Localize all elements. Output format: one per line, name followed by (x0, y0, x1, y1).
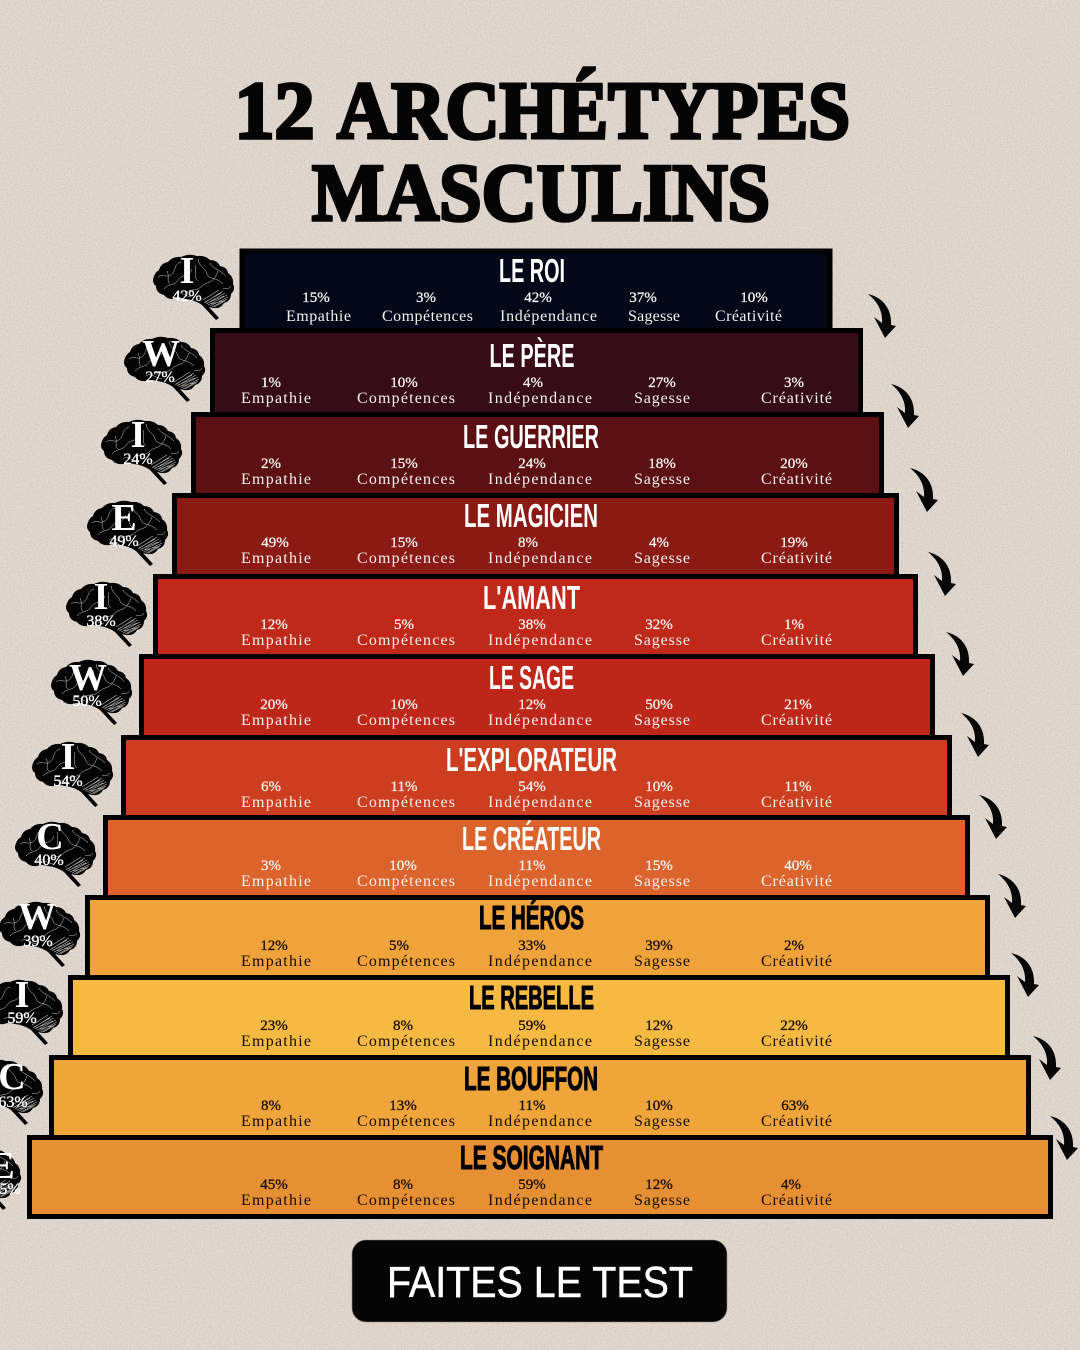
stats: Le Rebelle: Empathie (241, 1033, 311, 1050)
stats: Le Sage: 50% (645, 697, 673, 713)
icon: brain W 50%: 50% (72, 693, 102, 710)
stats: Le Magicien: 49% (261, 535, 289, 551)
stats: L'Explorateur: Sagesse (634, 794, 690, 811)
stats: Le Bouffon: 8% (261, 1098, 281, 1114)
stats: Le Héros (241, 938, 832, 970)
stats: Le Père: Indépendance (488, 390, 592, 407)
icon: brain C 63% (0, 1056, 43, 1125)
stats: Le Roi: 3% (416, 290, 436, 306)
icon: brain I 42%: 42% (172, 288, 202, 305)
stats: Le Père: 10% (390, 375, 418, 391)
stats: L'Amant: 32% (645, 617, 673, 633)
stats: Le Sage: 20% (260, 697, 288, 713)
stats: Le Roi (286, 290, 782, 325)
stats: Le Roi: Empathie (286, 308, 351, 325)
icon: brain W 50% (51, 657, 132, 725)
heading: L'Explorateur: L'EXPLORATEUR (446, 741, 617, 778)
stats: Le Magicien: Indépendance (488, 550, 592, 567)
stats: L'Amant: Compétences (357, 632, 455, 649)
stats: Le Bouffon: Compétences (357, 1113, 455, 1130)
icon: brain W 39%: 39% (23, 933, 53, 950)
stats: Le Guerrier: Empathie (241, 471, 311, 488)
stats: Le Père: Sagesse (634, 390, 690, 407)
arrow: Explorateur to Créateur (979, 795, 1007, 839)
stats: Le Roi: 42% (524, 290, 552, 306)
icon: brain I 42% (153, 250, 234, 320)
stats: Le Guerrier: 15% (390, 456, 418, 472)
stats: Le Rebelle (241, 1018, 832, 1050)
stats: L'Amant: Sagesse (634, 632, 690, 649)
stats: L'Amant (241, 617, 832, 649)
stats: Le Guerrier: 2% (261, 456, 281, 472)
arrow: Créateur to Héros (998, 874, 1026, 918)
panel: Le Guerrier (194, 414, 882, 498)
stats: Le Créateur: 3% (261, 858, 281, 874)
stats: Le Père (241, 375, 832, 407)
stats: Le Héros: 12% (260, 938, 288, 954)
panel: Le Père (212, 330, 860, 416)
stats: Le Magicien: 8% (518, 535, 538, 551)
icon: brain W 50%: W (69, 657, 107, 699)
icon: brain C 40%: 40% (34, 852, 64, 869)
stats: Le Soignant: 59% (518, 1177, 546, 1193)
stats: Le Soignant (241, 1177, 832, 1209)
stats: Le Créateur: Indépendance (488, 873, 592, 890)
heading: Le Rebelle: LE REBELLE (469, 979, 594, 1016)
stats: Le Bouffon (241, 1098, 832, 1130)
stats: Le Héros: Créativité (761, 953, 832, 970)
icon: brain I 54%: I (61, 736, 75, 778)
stats: Le Magicien: 4% (649, 535, 669, 551)
stats: Le Père: 4% (523, 375, 543, 391)
stats: L'Explorateur: 54% (518, 779, 546, 795)
panel: L'Explorateur (124, 738, 950, 820)
stats: Le Créateur: 11% (519, 858, 545, 874)
stats: Le Sage (241, 697, 832, 729)
icon: brain W 39%: W (18, 896, 56, 938)
stats: Le Soignant: Empathie (241, 1192, 311, 1209)
stats: Le Magicien: Sagesse (634, 550, 690, 567)
icon: brain E 49%: E (111, 497, 137, 539)
stats: L'Amant: Empathie (241, 632, 311, 649)
icon: brain C 40% (15, 816, 96, 887)
stats: Le Roi: Compétences (382, 308, 473, 325)
panel: Le Rebelle (70, 978, 1008, 1058)
icon: brain W 27%: 27% (145, 369, 175, 386)
stats: Le Magicien: Créativité (761, 550, 832, 567)
arrow: Bouffon to Soignant (1050, 1116, 1078, 1160)
stats: Le Guerrier: Indépendance (488, 471, 592, 488)
stats: Le Soignant: Compétences (357, 1192, 455, 1209)
button: Faites le test (352, 1240, 727, 1322)
arrow: Père to Guerrier (891, 384, 919, 428)
heading: Le Sage: LE SAGE (489, 659, 574, 696)
icon: brain C 40%: C (36, 816, 64, 858)
stats: Le Créateur: Sagesse (634, 873, 690, 890)
icon: brain I 38%: I (94, 576, 108, 618)
stats: Le Bouffon: Indépendance (488, 1113, 592, 1130)
arrow: Amant to Sage (946, 632, 974, 676)
stats: Le Rebelle: 8% (393, 1018, 413, 1034)
title (234, 65, 850, 238)
panel: Le Sage (142, 656, 932, 740)
stats: Le Guerrier (241, 456, 832, 488)
stats: L'Amant: 12% (260, 617, 288, 633)
stats: L'Amant: 5% (394, 617, 414, 633)
stats: L'Explorateur: 11% (785, 779, 811, 795)
stats: Le Sage: Compétences (357, 712, 455, 729)
stats: Le Guerrier: 18% (648, 456, 676, 472)
stats: Le Créateur: Créativité (761, 873, 832, 890)
panel: Le Créateur (106, 818, 968, 900)
stats: Le Rebelle: 12% (645, 1018, 673, 1034)
icon: brain I 54% (32, 736, 113, 807)
stats: Le Soignant: Créativité (761, 1192, 832, 1209)
stats: Le Héros: 39% (645, 938, 673, 954)
stats: Le Bouffon: 10% (645, 1098, 673, 1114)
stats: Le Bouffon: 11% (519, 1098, 545, 1114)
icon: brain I 59%: I (15, 974, 29, 1016)
stats: Le Père: 1% (261, 375, 281, 391)
panel: Le Bouffon (52, 1058, 1028, 1138)
heading: Le Père: LE PÈRE (490, 337, 574, 374)
stats: L'Explorateur: Indépendance (488, 794, 592, 811)
stats: L'Explorateur: Compétences (357, 794, 455, 811)
arrow: Héros to Rebelle (1011, 953, 1039, 997)
stats: Le Créateur: Compétences (357, 873, 455, 890)
stats: Le Soignant: 4% (781, 1177, 801, 1193)
icon: brain I 59%: 59% (7, 1010, 37, 1027)
stats: Le Rebelle: Créativité (761, 1033, 832, 1050)
heading: Le Roi: LE ROI (499, 252, 565, 289)
stats: Le Créateur (241, 858, 832, 890)
stats: Le Sage: 21% (784, 697, 812, 713)
stats: Le Soignant: 12% (645, 1177, 673, 1193)
icon: brain I 24%: I (131, 414, 145, 456)
stats: Le Guerrier: Compétences (357, 471, 455, 488)
icon: brain I 24%: 24% (123, 451, 153, 468)
stats: Le Créateur: Empathie (241, 873, 311, 890)
stats: Le Père: Compétences (357, 390, 455, 407)
panel: Le Héros (88, 898, 988, 978)
icon: brain I 38% (66, 576, 147, 647)
heading: L'Amant: L'AMANT (483, 579, 580, 616)
stats: L'Explorateur (241, 779, 832, 811)
stats: Le Héros: Indépendance (488, 953, 592, 970)
icon: brain E 45% (0, 1145, 21, 1210)
icon: brain I 24% (101, 414, 182, 485)
stats: L'Explorateur: Empathie (241, 794, 311, 811)
stats: Le Guerrier: Créativité (761, 471, 832, 488)
stats: Le Sage: 12% (518, 697, 546, 713)
stats: Le Roi: Créativité (715, 308, 782, 325)
stats: L'Amant: 1% (784, 617, 804, 633)
stats: Le Magicien: Compétences (357, 550, 455, 567)
title: 12 (234, 65, 314, 156)
stats: Le Sage: Empathie (241, 712, 311, 729)
stats: Le Roi: 37% (629, 290, 657, 306)
stats: Le Rebelle: Sagesse (634, 1033, 690, 1050)
stats: Le Rebelle: 59% (518, 1018, 546, 1034)
stats: Le Sage: 10% (390, 697, 418, 713)
heading: Le Créateur: LE CRÉATEUR (462, 820, 601, 857)
stats: Le Roi: Indépendance (500, 308, 597, 325)
heading: Le Héros: LE HÉROS (479, 899, 584, 936)
stats: Le Roi: 10% (740, 290, 768, 306)
stats: Le Héros: 33% (518, 938, 546, 954)
stats: Le Roi: 15% (302, 290, 330, 306)
stats: Le Bouffon: Créativité (761, 1113, 832, 1130)
stats: Le Père: Créativité (761, 390, 832, 407)
stats: Le Guerrier: Sagesse (634, 471, 690, 488)
button: Faites le test: FAITES LE TEST (387, 1258, 693, 1307)
stats: Le Sage: Créativité (761, 712, 832, 729)
stats: Le Héros: Empathie (241, 953, 311, 970)
stats: L'Explorateur: 11% (391, 779, 417, 795)
icon: brain W 39% (0, 896, 80, 967)
arrow: Sage to Explorateur (961, 713, 989, 757)
stats: Le Bouffon: Sagesse (634, 1113, 690, 1130)
stats: Le Sage: Sagesse (634, 712, 690, 729)
stats: Le Bouffon: Empathie (241, 1113, 311, 1130)
icon: brain I 38%: 38% (86, 613, 116, 630)
stats: Le Père: Empathie (241, 390, 311, 407)
stats: Le Rebelle: Indépendance (488, 1033, 592, 1050)
stats: Le Créateur: 40% (784, 858, 812, 874)
panel: L'Amant (156, 576, 916, 658)
icon: brain I 59% (0, 974, 63, 1045)
stats: Le Héros: 5% (389, 938, 409, 954)
panel: Le Soignant (30, 1138, 1050, 1216)
stats: Le Magicien: 19% (780, 535, 808, 551)
heading: Le Bouffon: LE BOUFFON (464, 1060, 598, 1097)
arrow: Guerrier to Magicien (910, 468, 938, 512)
stats: L'Explorateur: 10% (645, 779, 673, 795)
stats: Le Guerrier: 20% (780, 456, 808, 472)
icon: brain E 49% (87, 497, 168, 566)
stats: L'Explorateur: 6% (261, 779, 281, 795)
stats: Le Créateur: 15% (645, 858, 673, 874)
arrow: Roi to Père (868, 294, 896, 338)
stats: Le Bouffon: 63% (781, 1098, 809, 1114)
stats: L'Amant: 38% (518, 617, 546, 633)
stats: Le Soignant: Indépendance (488, 1192, 592, 1209)
stats: Le Héros: Sagesse (634, 953, 690, 970)
title: ARCHÉTYPES (337, 65, 850, 156)
title: MASCULINS (312, 147, 770, 238)
stats: Le Soignant: Sagesse (634, 1192, 690, 1209)
stats: Le Roi: Sagesse (628, 308, 680, 325)
stats: Le Sage: Indépendance (488, 712, 592, 729)
stats: Le Rebelle: 23% (260, 1018, 288, 1034)
heading: Le Magicien: LE MAGICIEN (464, 497, 598, 534)
stats: L'Explorateur: Créativité (761, 794, 832, 811)
stats: Le Rebelle: 22% (780, 1018, 808, 1034)
arrow: Rebelle to Bouffon (1033, 1036, 1061, 1080)
heading: Le Soignant: LE SOIGNANT (460, 1139, 603, 1176)
stats: Le Magicien: Empathie (241, 550, 311, 567)
icon: brain I 42%: I (180, 250, 194, 292)
stats: Le Père: 3% (784, 375, 804, 391)
icon: brain E 49%: 49% (109, 533, 139, 550)
stats: Le Héros: Compétences (357, 953, 455, 970)
stats: Le Créateur: 10% (389, 858, 417, 874)
icon: brain I 54%: 54% (53, 773, 83, 790)
stats: L'Amant: Indépendance (488, 632, 592, 649)
panel: Le Roi (242, 251, 830, 336)
stats: Le Magicien (241, 535, 832, 567)
stats: Le Bouffon: 13% (389, 1098, 417, 1114)
icon: brain W 27%: W (142, 333, 180, 375)
stats: Le Héros: 2% (784, 938, 804, 954)
arrow: Magicien to Amant (928, 552, 956, 596)
stats: Le Père: 27% (648, 375, 676, 391)
panel: Le Magicien (174, 496, 896, 578)
stats: Le Rebelle: Compétences (357, 1033, 455, 1050)
heading: Le Guerrier: LE GUERRIER (463, 418, 599, 455)
stats: Le Guerrier: 24% (518, 456, 546, 472)
stats: Le Soignant: 45% (260, 1177, 288, 1193)
stats: Le Soignant: 8% (393, 1177, 413, 1193)
icon: brain W 27% (124, 333, 205, 402)
stats: L'Amant: Créativité (761, 632, 832, 649)
stats: Le Magicien: 15% (390, 535, 418, 551)
